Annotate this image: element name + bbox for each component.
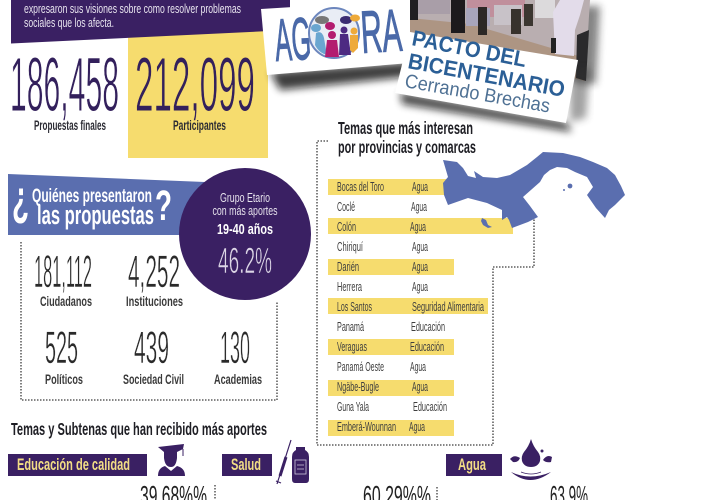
- intro text: [24, 2, 241, 30]
- table: provinces and topics: Agua: [412, 260, 428, 274]
- card: Pacto del Bicentenario: [395, 25, 590, 132]
- banner heading: Quiénes presentaron: [32, 186, 152, 207]
- table: provinces and topics: Educación: [411, 320, 445, 334]
- table: provinces and topics: Ngäbe-Bugle: [337, 380, 379, 394]
- stat: propuestas finales: Propuestas finales: [34, 118, 106, 133]
- stat: ciudadanos: [34, 246, 92, 309]
- table: provinces and topics: Agua: [410, 360, 426, 374]
- stat: politicos: 525: [45, 322, 78, 373]
- logo wordmark: AG: [273, 5, 313, 74]
- stat: sociedad civil: [123, 322, 184, 387]
- stat: participantes: Participantes: [173, 118, 226, 133]
- circle: grupo etario: [179, 168, 311, 300]
- card title: BICENTENARIO: [406, 48, 567, 102]
- stat: politicos: Políticos: [45, 372, 83, 387]
- table: provinces and topics: Seguridad Alimentaria: [412, 300, 484, 314]
- panel: intro purple header: [11, 0, 290, 44]
- panel: yellow participants background: [128, 30, 268, 158]
- text: 4,252: [128, 246, 180, 297]
- table: provinces and topics: [328, 179, 513, 436]
- panel: dotted box of presenters: [21, 242, 277, 400]
- icon: water drop: [510, 439, 552, 480]
- panel: quienes presentaron banner: [8, 170, 205, 235]
- logo wordmark: [273, 0, 404, 74]
- panel: dotted outline of province table: [317, 141, 534, 445]
- heading: temas por provincias: por provincias y comarcas: [338, 137, 476, 157]
- table: provinces and topics: Guna Yala: [337, 400, 369, 414]
- icon: graduate: [158, 444, 185, 476]
- table: provinces and topics: Educación: [413, 400, 447, 414]
- text: 181,112: [34, 246, 92, 297]
- table: provinces and topics: Darién: [337, 260, 359, 274]
- stat: politicos: [45, 322, 83, 387]
- text: 212,099: [135, 42, 255, 128]
- heading: temas por provincias: [338, 118, 476, 157]
- logo card: Agora: [261, 0, 416, 90]
- card subtitle: Cerrando Brechas: [403, 70, 552, 117]
- intro text: expresaron sus visiones sobre como resolver problemas: [24, 2, 241, 16]
- table: provinces and topics: Chiriquí: [337, 240, 363, 254]
- label: agua: [446, 454, 502, 476]
- banner question mark: ?: [155, 182, 172, 230]
- circle percentage: 46.2%: [218, 240, 272, 281]
- table: provinces and topics: Panamá Oeste: [337, 360, 384, 374]
- circle caption: Grupo Etario: [220, 191, 270, 205]
- table: provinces and topics: Agua: [409, 420, 425, 434]
- table: provinces and topics: Educación: [410, 340, 444, 354]
- label: educacion de calidad: Educación de calidad: [17, 455, 130, 474]
- table: provinces and topics: Los Santos: [337, 300, 372, 314]
- table: provinces and topics: Agua: [412, 280, 428, 294]
- circle age range: 19-40 años: [217, 221, 273, 238]
- stat: instituciones: [126, 246, 183, 309]
- stat: academias: Academias: [214, 372, 262, 387]
- map: Panama: [443, 152, 625, 228]
- stat: academias: [214, 322, 262, 387]
- banner heading: [32, 186, 154, 230]
- stat: sociedad civil: Sociedad Civil: [123, 372, 184, 387]
- card title: PACTO DEL: [410, 25, 529, 72]
- text: 186,458: [10, 42, 119, 128]
- table: provinces and topics: Herrera: [337, 280, 362, 294]
- circle caption: [212, 191, 278, 218]
- table: provinces and topics: Emberá-Wounnan: [337, 420, 396, 434]
- table: provinces and topics: Agua: [410, 220, 426, 234]
- table: provinces and topics: Agua: [412, 240, 428, 254]
- banner inverted question mark: ¿: [12, 170, 29, 226]
- table: provinces and topics: Bocas del Toro: [337, 180, 384, 194]
- circle caption: con más aportes: [212, 204, 278, 218]
- icon: syringe and vial: [276, 440, 309, 484]
- table: provinces and topics: Agua: [411, 200, 427, 214]
- label: salud: Salud: [231, 455, 261, 474]
- label: educacion de calidad: [8, 454, 147, 476]
- intro text: sociales que los afecta.: [24, 16, 114, 30]
- stat: instituciones: Instituciones: [126, 294, 183, 309]
- stat: ciudadanos: Ciudadanos: [40, 294, 92, 309]
- table: provinces and topics: Panamá: [337, 320, 364, 334]
- table: provinces and topics: Veraguas: [337, 340, 367, 354]
- table: provinces and topics: Coclé: [337, 200, 355, 214]
- logo emblem: people circle: [309, 8, 360, 58]
- stat: propuestas finales: [10, 42, 119, 133]
- table: provinces and topics: Agua: [412, 380, 428, 394]
- table: provinces and topics: Colón: [337, 220, 356, 234]
- label: salud: [222, 454, 272, 476]
- photo: auditorium: [410, 0, 600, 84]
- card title: [406, 25, 567, 102]
- label: agua: Agua: [458, 455, 486, 474]
- table: provinces and topics: Agua: [412, 180, 428, 194]
- banner heading: las propuestas: [37, 200, 154, 230]
- heading: temas y subtemas: Temas y Subtenas que han recibido más aportes: [11, 419, 267, 439]
- stat: participantes: [135, 42, 255, 133]
- stat: academias: 130: [220, 322, 250, 373]
- stat: sociedad civil: 439: [134, 322, 169, 373]
- heading: temas por provincias: Temas que más interesan: [338, 118, 473, 138]
